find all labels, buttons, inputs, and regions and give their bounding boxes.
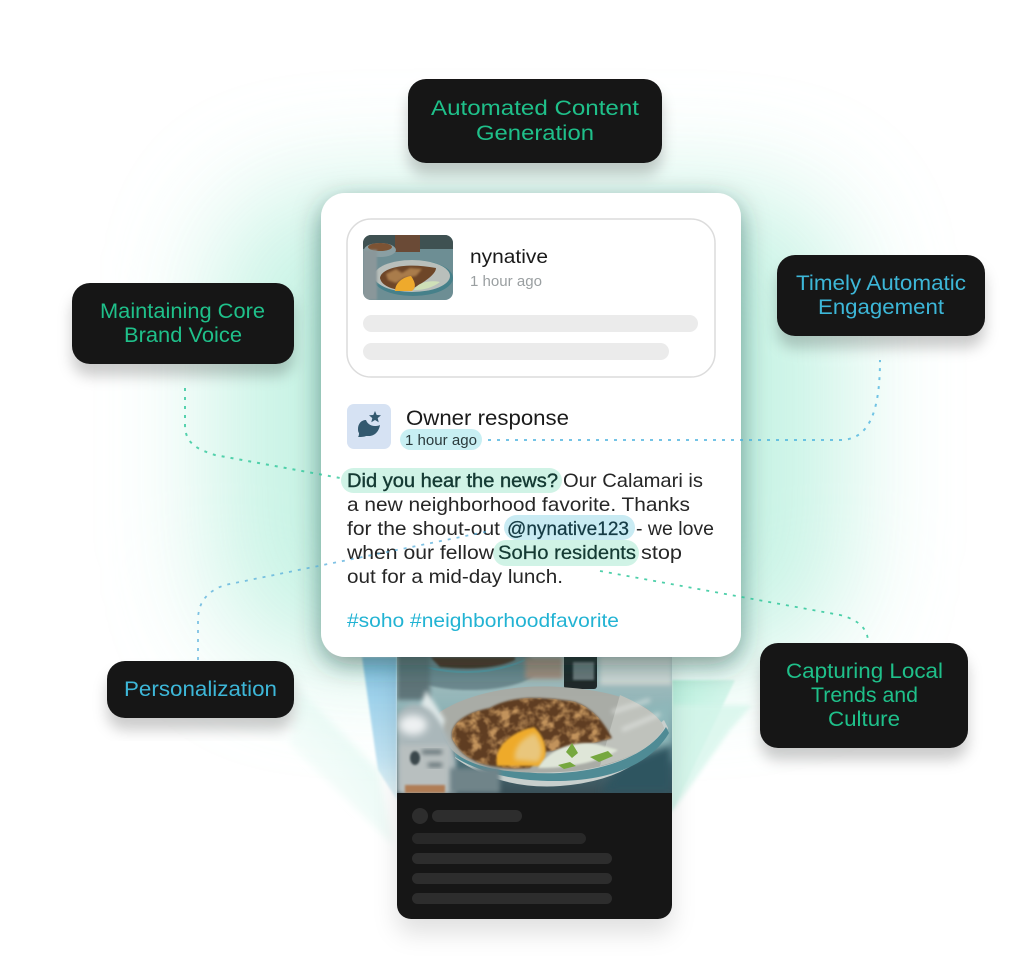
response body text: Our Calamari is [563,470,703,492]
highlight chips [341,468,639,566]
dark post card with photo [397,640,672,919]
icon: chat bubble with star [347,404,391,449]
label: maintaining core brand voice [72,283,294,364]
label: capturing local trends and culture [760,643,968,748]
review time: 1 hour ago [470,273,542,290]
response body text: for the shout-out [347,518,501,540]
review card [347,219,715,377]
lemon [496,727,546,766]
response body text: out for a mid-day lunch. [347,566,563,588]
food photo [397,646,672,793]
label: timely automatic engagement: Timely Automatic [796,272,966,295]
label: automated content generation [408,79,662,163]
response body text: @nynative123 [507,518,629,540]
background glow [215,190,845,845]
label: capturing local trends and culture: Capturing Local [786,660,943,683]
placeholder avatar [412,808,428,824]
background jar [564,657,597,689]
label: timely automatic engagement [777,255,985,336]
connector: timely engagement [488,360,880,440]
response body text: - we love [636,518,714,540]
thumbnail photo [363,235,453,300]
plate [455,720,668,786]
salad [538,743,618,768]
response body text: Did you hear the news? [347,470,558,492]
main response card [321,193,741,657]
label: personalization [107,661,294,718]
response body text: when our fellow [346,542,495,564]
label: capturing local trends and culture: Trends and [811,684,918,707]
response body text [346,470,714,588]
label: capturing local trends and culture: Culture [828,708,900,731]
bottle [397,650,430,700]
owner response heading: Owner response [406,407,569,430]
food [452,698,612,768]
connector: brand voice [185,388,340,478]
review author: nynative [470,247,548,268]
response body text: a new neighborhood favorite. Thanks [347,494,690,516]
connector: personalization [198,531,490,660]
label: maintaining core brand voice: Brand Voice [124,324,242,347]
hashtags: #soho #neighborhoodfavorite [347,610,619,632]
back plate [428,657,530,691]
label: maintaining core brand voice: Maintaining Core [100,300,265,323]
time chip: 1 hour ago [405,432,477,449]
label: automated content generation: Automated Content [431,96,639,120]
response body text: stop [641,542,682,564]
label: timely automatic engagement: Engagement [818,296,944,319]
connector: local trends [600,571,868,642]
placeholder lines [363,315,698,360]
placeholder lines [412,810,612,904]
response body text: SoHo residents [498,542,636,564]
label: automated content generation: Generation [476,121,594,145]
label: personalization: Personalization [124,678,277,701]
